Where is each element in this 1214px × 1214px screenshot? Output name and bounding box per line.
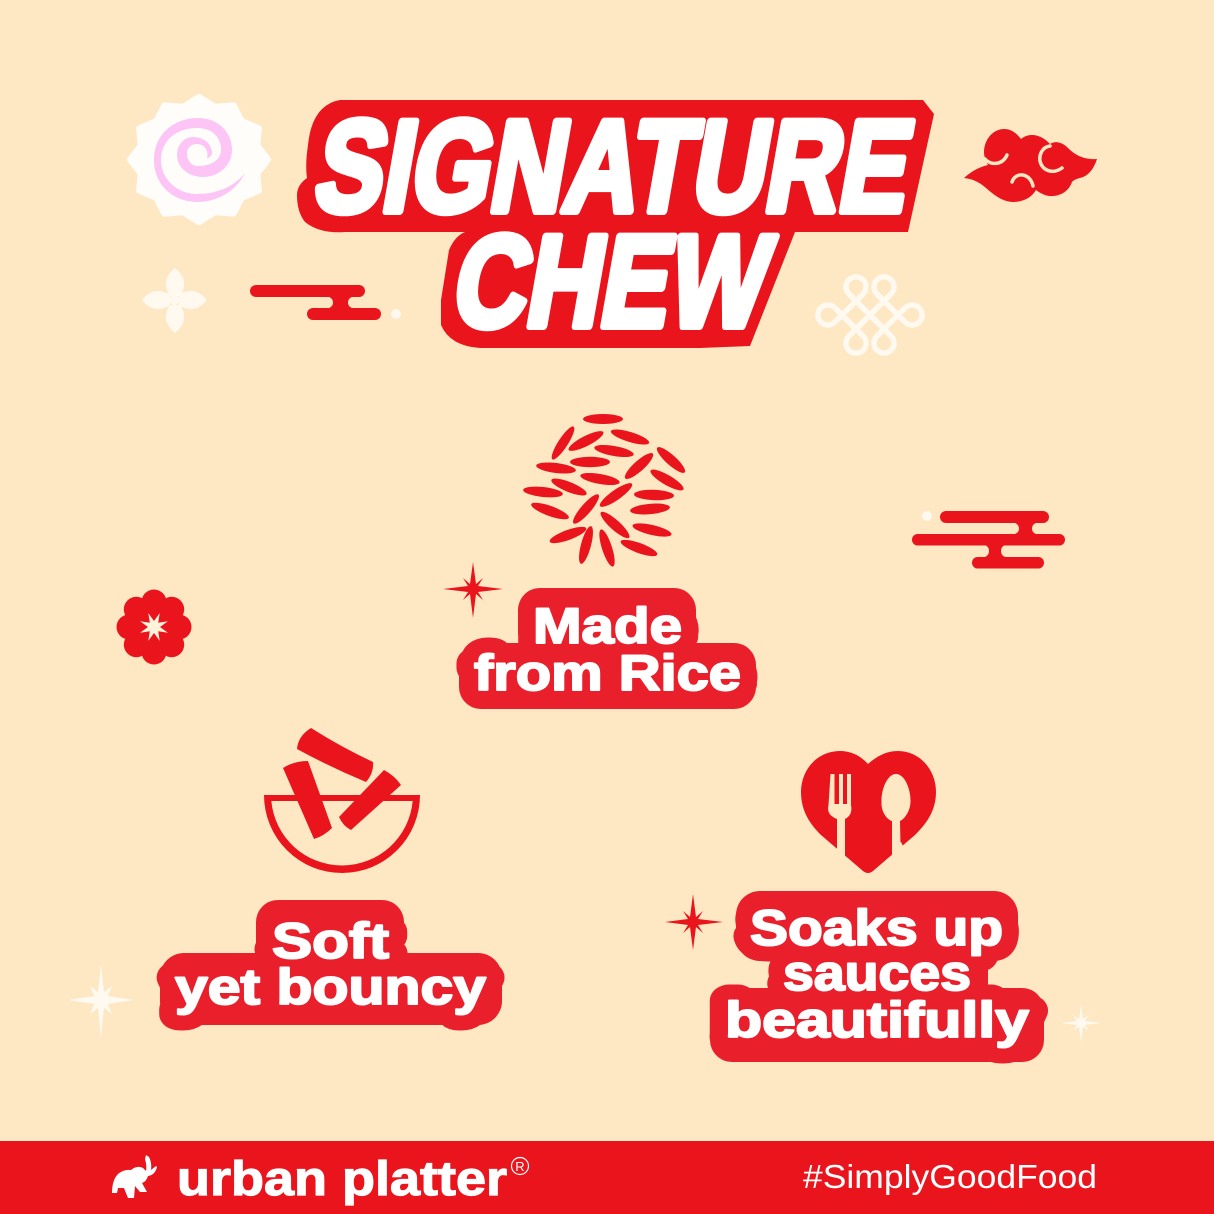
hashtag: #SimplyGoodFood: #SimplyGoodFood	[803, 1158, 1097, 1195]
icon: cloud lines, right	[912, 511, 1065, 568]
icon: red blossom	[116, 590, 192, 664]
label: Soft yet bouncy: Soft	[272, 913, 389, 969]
label: Soaks up sauces beautifully: sauces	[783, 945, 971, 1001]
label: Soft yet bouncy: Soft	[272, 913, 389, 969]
icon: rice grains	[523, 414, 688, 568]
label: Made from Rice: from Rice	[474, 645, 741, 701]
footer banner	[0, 1141, 1214, 1214]
label: Soft yet bouncy	[160, 900, 502, 1025]
label: Soaks up sauces beautifully: Soaks up	[750, 900, 1003, 956]
label: Made from Rice: Made	[533, 598, 682, 654]
label: Made from Rice: Made	[533, 598, 682, 654]
icon: heart with fork and spoon	[801, 751, 936, 873]
title: Signature Chew: CHEW	[444, 208, 782, 354]
icon: red sparkle by Soaks up	[665, 894, 723, 950]
label: Soaks up sauces beautifully: sauces	[783, 945, 971, 1001]
icon: endless knot	[818, 277, 922, 353]
label: Soaks up sauces beautifully: beautifully	[725, 992, 1029, 1048]
label: Soaks up sauces beautifully: beautifully	[725, 992, 1029, 1048]
label: Soaks up sauces beautifully: Soaks up	[750, 900, 1003, 956]
icon: elephant logo	[112, 1155, 157, 1198]
label: Soaks up sauces beautifully	[710, 891, 1044, 1062]
icon: auspicious cloud	[964, 129, 1097, 202]
registered mark	[512, 1158, 528, 1174]
registered mark: R	[515, 1159, 525, 1174]
title: Signature Chew	[297, 93, 934, 354]
icon: white four-petal flower	[142, 268, 207, 333]
icon: red sparkle by Made from Rice	[443, 562, 503, 618]
icon: white sparkle, left	[68, 964, 134, 1038]
icon: small red cloud lines, top left	[250, 285, 401, 320]
label: Made from Rice	[459, 588, 756, 709]
brand name: urban platter: urban platter	[177, 1153, 507, 1206]
title: Signature Chew: SIGNATURE	[306, 93, 924, 239]
label: Soft yet bouncy: yet bouncy	[175, 959, 486, 1015]
icon: white sparkle, right	[1061, 1004, 1101, 1042]
icon: bowl with rice cakes	[264, 728, 420, 873]
label: Made from Rice: from Rice	[474, 645, 741, 701]
label: Soft yet bouncy: yet bouncy	[175, 959, 486, 1015]
icon: narutomaki fish cake	[131, 98, 267, 222]
